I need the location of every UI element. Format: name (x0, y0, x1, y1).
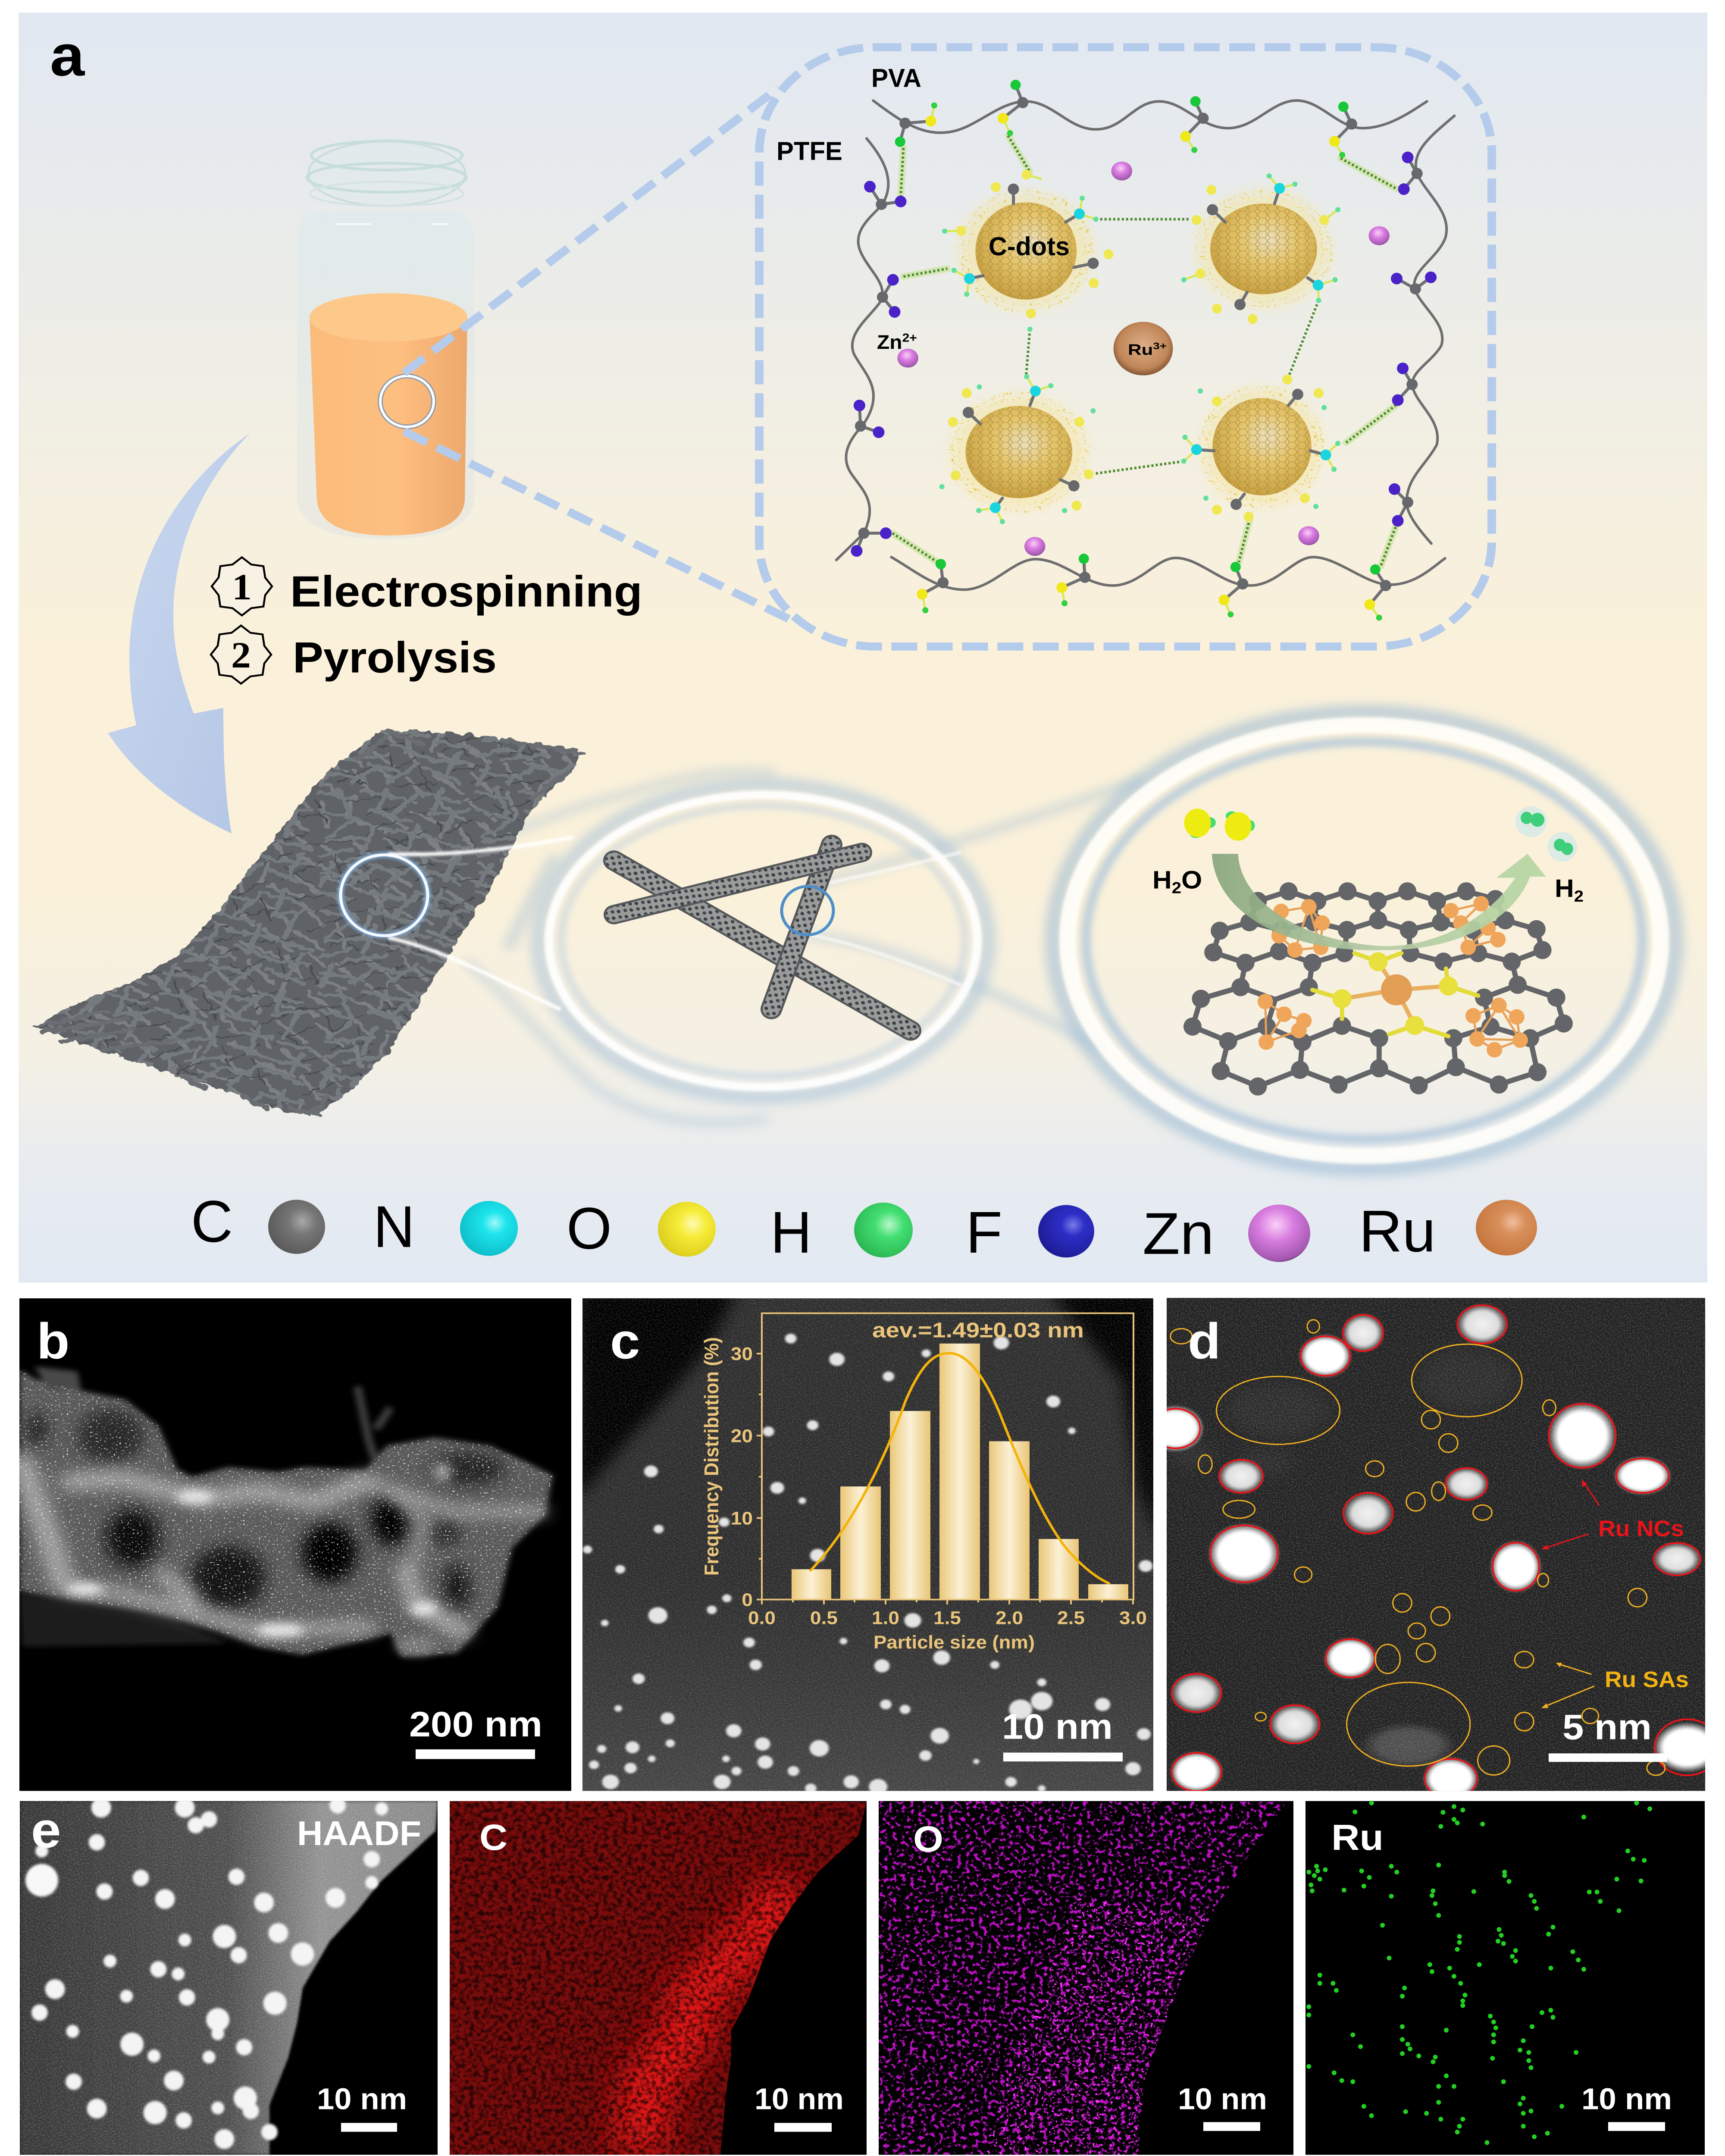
element legend (191, 1188, 1537, 1266)
x tick labels: 2.0 (996, 1608, 1023, 1628)
graphene lattice with Ru (1184, 806, 1577, 1087)
Zn2+ label: 2+ (902, 331, 917, 345)
PVA label: PVA (871, 64, 921, 93)
hydrogen bonds (892, 135, 1397, 566)
carbon nanofiber mat (24, 721, 593, 1123)
histogram bars (792, 1344, 1128, 1599)
Ru single atom outlines (1171, 1320, 1665, 1775)
x tick labels: 0.0 (748, 1608, 776, 1628)
bright clusters (1147, 1304, 1720, 1800)
scale bar O map (1203, 2122, 1260, 2131)
molecular drawing (836, 85, 1454, 617)
middle magnifier ring (538, 784, 988, 1097)
chart frame and ticks (757, 1313, 1133, 1604)
central Ru atom (1381, 975, 1412, 1006)
y tick labels: 0 (742, 1590, 753, 1610)
lattice bonds (1193, 891, 1564, 1087)
mat magnifier ring (341, 855, 428, 936)
particle size histogram inset (701, 1313, 1147, 1652)
nanoparticle speckle (19, 1298, 571, 1710)
panel e: HAADF image (20, 1801, 438, 2155)
carbon signal (450, 1801, 867, 2155)
image grain (20, 1801, 438, 2155)
H2 label: H (1555, 874, 1574, 903)
porous nanotubes (614, 845, 911, 1031)
hydrogen molecules (1515, 806, 1577, 862)
scale text C map: 10 nm (754, 2082, 844, 2116)
scale bar d (1549, 1753, 1667, 1762)
Ru NCs arrows (1541, 1479, 1599, 1549)
H2O label: O (1181, 866, 1202, 894)
x tick labels: 1.5 (933, 1608, 961, 1628)
scale text Ru map: 10 nm (1581, 2082, 1672, 2116)
legend C: C (191, 1188, 233, 1254)
Ru nanocluster outlines (1151, 1305, 1720, 1799)
scale text e: 10 nm (317, 2082, 407, 2116)
panel label a: a (50, 23, 85, 88)
scale bar c (1003, 1752, 1123, 1761)
reaction arrow (1212, 854, 1546, 950)
PVA large hydrogen atoms (900, 85, 1375, 570)
Ru3+ label: Ru (1128, 341, 1150, 358)
dot nitrogen atoms (969, 188, 1326, 508)
panel a background (19, 13, 1707, 1282)
oxygen bright signal (879, 1801, 1293, 2155)
map label O: O (913, 1819, 943, 1859)
C-dots halos (942, 181, 1340, 518)
Zn2+ label: Zn (877, 332, 902, 353)
panel d: high-resolution image with annotations (1147, 1298, 1720, 1800)
PTFE label: PTFE (776, 137, 842, 166)
right magnifier ring (1053, 712, 1675, 1169)
PVA small hydrogen atoms (925, 106, 1379, 617)
dark pores (28, 1410, 505, 1611)
y tick labels: 20 (731, 1426, 753, 1446)
Ru clusters bonds (1265, 904, 1520, 1050)
bright ridges (22, 1466, 542, 1630)
badge 1: 1 (232, 567, 252, 608)
vial with orange solution (297, 141, 474, 539)
map label Ru: Ru (1331, 1818, 1384, 1858)
water molecules (1184, 808, 1255, 841)
carbon dot spheres (966, 202, 1317, 498)
x tick labels: 2.5 (1057, 1608, 1085, 1628)
scale text 10 nm: 10 nm (1002, 1707, 1113, 1747)
panel: Ru elemental map (1305, 1801, 1705, 2155)
Ru SAs label: Ru SAs (1605, 1667, 1689, 1692)
step 1 text: Electrospinning (290, 567, 642, 616)
steps (211, 557, 642, 684)
scale text O map: 10 nm (1178, 2082, 1267, 2116)
curved process arrow (108, 433, 250, 834)
faint single atom regions (1170, 1351, 1514, 1475)
Ru ion (1114, 322, 1173, 376)
Ru3+ label: 3+ (1153, 341, 1167, 351)
mat magnifier ring highlight (341, 855, 428, 936)
panel: C elemental map (450, 1801, 867, 2155)
mean size annotation: aev.=1.49±0.03 nm (872, 1318, 1084, 1342)
nanoparticles (583, 1334, 1152, 1795)
side group bonds (857, 85, 1431, 605)
Ru SAs arrows (1541, 1663, 1594, 1708)
legend Ru: Ru (1359, 1198, 1436, 1264)
small magnifier ring (782, 887, 833, 935)
scale bar Ru map (1608, 2122, 1665, 2131)
precursor network diagram (776, 64, 1454, 617)
panel a: synthesis schematic (19, 13, 1707, 1282)
image grain (1167, 1298, 1705, 1791)
HAADF label: HAADF (297, 1814, 421, 1852)
panel: O elemental map (879, 1801, 1293, 2155)
panel b: HAADF-STEM fiber image (19, 1298, 571, 1791)
fluorine atoms (857, 157, 1431, 551)
carbon support (20, 1801, 438, 2155)
badge 2: 2 (231, 635, 251, 676)
y axis title: Frequency Distribution (%) (701, 1337, 723, 1576)
Ru NCs label: Ru NCs (1598, 1517, 1684, 1541)
legend N: N (373, 1194, 415, 1260)
y tick labels: 10 (731, 1508, 753, 1529)
zoom ring highlight (380, 376, 434, 427)
dashed zoom lines (404, 88, 789, 619)
y tick labels: 30 (731, 1344, 753, 1364)
scale text 5 nm: 5 nm (1562, 1708, 1652, 1747)
panel label b: b (37, 1313, 69, 1369)
fit curve (811, 1353, 1109, 1583)
scale bar b (416, 1749, 535, 1759)
carbon atoms (861, 103, 1417, 586)
legend H: H (770, 1199, 812, 1265)
x tick labels: 0.5 (810, 1608, 838, 1628)
zoom ring on vial (380, 376, 434, 427)
legend F: F (966, 1199, 1002, 1265)
sulfur-like coordination atoms (1342, 962, 1448, 1025)
dot hydrogen atoms (942, 176, 1338, 522)
PVA oxygen atoms (922, 118, 1370, 605)
empty vacuum regions (576, 1291, 1161, 1541)
x axis title: Particle size (nm) (873, 1632, 1035, 1652)
dot oxygen atoms (953, 175, 1324, 517)
fiber body (19, 1366, 553, 1657)
dashed callout box (759, 47, 1492, 646)
loose fiber ends (36, 731, 584, 1116)
Ru particles (40, 1805, 382, 2139)
lattice atoms (1193, 891, 1564, 1087)
step 2 text: Pyrolysis (293, 633, 497, 682)
polymer chains (836, 100, 1454, 589)
scale bar C map (774, 2123, 832, 2132)
badge 1 (212, 557, 272, 615)
magnifier halo wisps (466, 772, 1143, 1123)
x tick labels: 3.0 (1119, 1608, 1147, 1628)
image grain (582, 1298, 1153, 1791)
C-dots label: C-dots (989, 232, 1070, 261)
scale bar e (341, 2123, 397, 2132)
panel label d: d (1188, 1313, 1221, 1369)
Ru single atom site bonds (1342, 962, 1448, 1025)
badge 2 (211, 626, 271, 684)
oxygen signal (879, 1801, 1293, 2155)
panel label c: c (610, 1313, 640, 1369)
light beams from mat ring (388, 837, 961, 1009)
H2O label: H (1152, 866, 1172, 894)
panel label e: e (31, 1802, 61, 1858)
scale text 200 nm: 200 nm (409, 1705, 542, 1744)
Ru cluster atoms (1265, 904, 1520, 1050)
map label C: C (479, 1818, 507, 1858)
ruthenium signal (1309, 1803, 1650, 2143)
y tick labels (731, 1344, 753, 1610)
x tick labels (748, 1608, 1147, 1628)
Zn ions (897, 162, 1390, 556)
bright patches (66, 1462, 451, 1655)
H2O label: 2 (1172, 879, 1181, 897)
legend O: O (567, 1195, 612, 1261)
x tick labels: 1.0 (872, 1608, 899, 1628)
legend Zn: Zn (1143, 1200, 1214, 1266)
sample brightness (582, 1575, 1153, 1791)
H2 label: 2 (1574, 887, 1584, 906)
panel c: particle image with size histogram (576, 1291, 1161, 1795)
